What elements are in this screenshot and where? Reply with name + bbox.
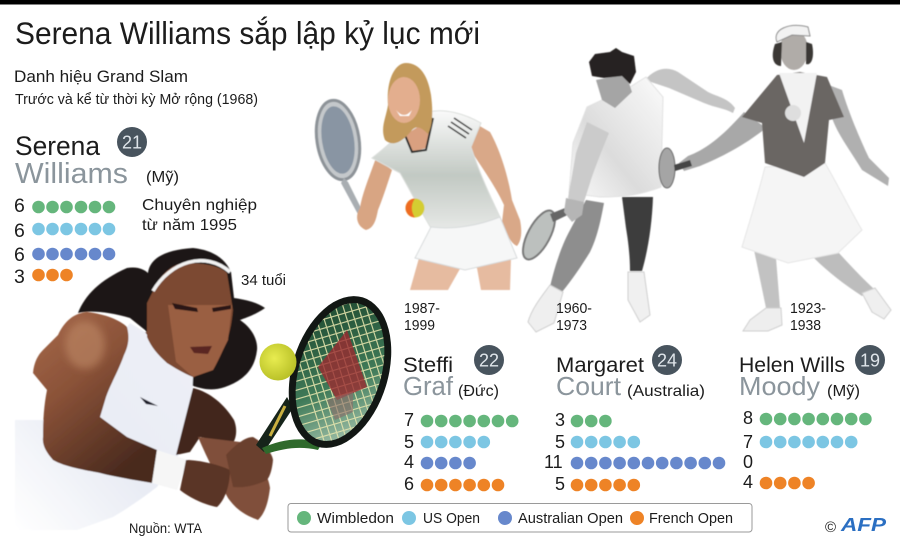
ball <box>406 198 424 218</box>
Graf title counts <box>404 410 518 494</box>
years: Court <box>556 300 592 334</box>
Moody name block: 19 <box>860 350 880 370</box>
Graf name block: (Đức) <box>458 383 499 400</box>
Court title counts: 5 <box>555 432 565 452</box>
Moody title counts: 0 <box>743 452 753 472</box>
legend: US Open <box>423 511 480 527</box>
Court title counts: 11 <box>544 452 563 472</box>
face <box>596 74 632 108</box>
Serena title counts: 6 <box>14 195 25 217</box>
Moody title counts: 4 <box>743 472 753 492</box>
Serena name block: Williams <box>15 158 128 190</box>
source: Nguồn: WTA <box>129 520 203 536</box>
Serena name block: (Mỹ) <box>146 169 179 186</box>
years: Graf <box>404 300 440 334</box>
racket <box>311 97 365 218</box>
title: Serena Williams sắp lập kỷ lục mới <box>15 15 480 51</box>
white dress <box>15 323 193 530</box>
Serena title counts: 6 <box>14 220 25 242</box>
Serena name block: Serena <box>15 131 100 161</box>
credit: AFP: AFP <box>840 515 887 535</box>
Graf name block <box>403 345 504 401</box>
headband <box>153 261 230 291</box>
racket <box>517 202 582 264</box>
Court name block: Court <box>556 371 622 401</box>
logo <box>140 397 158 406</box>
Moody name block: (Mỹ) <box>827 383 860 400</box>
legend: French Open <box>649 511 733 527</box>
Moody name block: Moody <box>739 371 820 401</box>
Graf name block: Steffi <box>403 353 453 377</box>
legend <box>288 504 752 532</box>
arm highlight <box>65 321 105 369</box>
Moody name block <box>739 345 885 401</box>
Court title counts: 5 <box>555 474 565 494</box>
Moody title counts <box>743 408 872 492</box>
sleeve stripes <box>448 118 472 138</box>
credit: AFP <box>825 515 887 536</box>
Court name block: (Australia) <box>627 383 705 400</box>
Graf title counts: 4 <box>404 452 414 472</box>
Court title counts <box>544 410 725 494</box>
Court name block <box>556 345 705 401</box>
years: Moody: 1923- <box>790 300 826 317</box>
hat <box>776 25 810 42</box>
years: Court: 1960- <box>556 300 592 317</box>
Serena title counts: 3 <box>14 266 25 288</box>
Court name block: Margaret <box>556 353 644 377</box>
hair <box>78 248 265 389</box>
photo: Steffi Graf <box>311 63 521 290</box>
years: Graf: 1987- <box>404 300 440 317</box>
racket: Serena <box>256 296 392 454</box>
Serena note: từ năm 1995 <box>142 217 237 234</box>
credit: AFP: © <box>825 519 836 536</box>
Moody title counts: 8 <box>743 408 753 428</box>
Graf title counts: 7 <box>404 410 414 430</box>
shoes <box>743 288 891 331</box>
Serena title counts: 6 <box>14 244 25 266</box>
legend: Wimbledon <box>317 511 394 527</box>
Court name block: 24 <box>657 350 677 370</box>
photo: Helen Wills Moody <box>659 25 891 331</box>
age label: 34 tuổi <box>241 273 286 289</box>
subtitle: Trước và kể từ thời kỳ Mở rộng (1968) <box>15 92 258 108</box>
legend: Australian Open <box>518 511 623 527</box>
subtitle: Danh hiệu Grand Slam <box>14 68 188 86</box>
years: Court: 1973 <box>556 317 587 334</box>
years: Moody <box>790 300 826 334</box>
top black bar <box>0 0 900 4</box>
hair <box>589 48 636 84</box>
head <box>147 263 233 377</box>
shoes <box>528 272 650 332</box>
Court title counts: 3 <box>555 410 565 430</box>
Graf name block: Graf <box>403 373 454 401</box>
racket <box>659 148 692 188</box>
Graf title counts: 6 <box>404 474 414 494</box>
Graf name block: 22 <box>479 350 499 370</box>
Serena name block <box>15 127 179 190</box>
hands <box>180 460 230 507</box>
neck <box>145 332 195 378</box>
subtitle <box>14 68 258 108</box>
near arm <box>33 312 157 483</box>
photo: Serena Williams <box>15 248 273 530</box>
Moody name block: Helen Wills <box>739 353 845 377</box>
photo: Margaret Court <box>517 48 735 332</box>
far arm <box>176 388 236 455</box>
years: Graf: 1999 <box>404 317 435 334</box>
wristband <box>152 450 188 490</box>
Serena name block: 21 <box>122 132 142 152</box>
Serena title counts <box>14 195 115 288</box>
tennis ball <box>260 344 296 380</box>
Graf title counts: 5 <box>404 432 414 452</box>
years: Moody: 1938 <box>790 317 821 334</box>
Serena note: Chuyên nghiệp <box>142 197 257 214</box>
Serena note <box>142 197 257 234</box>
Moody title counts: 7 <box>743 432 753 452</box>
